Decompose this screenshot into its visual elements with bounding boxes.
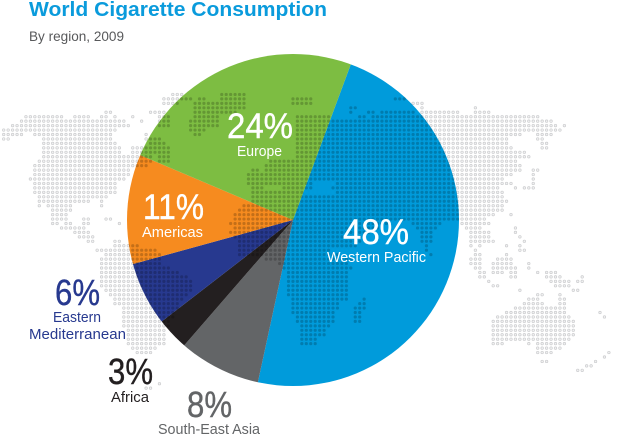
slice: Africa xyxy=(162,220,293,346)
slice: Europe xyxy=(140,54,351,220)
label: South-East Asia 8%: South-East Asia xyxy=(158,422,261,438)
dark map dots over pie xyxy=(128,92,459,346)
label: Americas 11% xyxy=(142,188,204,241)
slice: South-East Asia xyxy=(184,220,293,382)
label: Africa 3%: 3% xyxy=(108,351,153,392)
label: Americas 11%: Americas xyxy=(142,225,203,241)
world dot map xyxy=(4,94,609,388)
label: Africa 3% xyxy=(108,351,153,406)
label: South-East Asia 8% xyxy=(158,384,261,438)
slice: Americas xyxy=(127,155,293,264)
label: Europe 24%: 24% xyxy=(227,107,293,146)
label: Eastern Mediterranean 6%: Mediterranean xyxy=(29,327,126,343)
label: Africa 3%: Africa xyxy=(111,390,150,406)
slice: Eastern Mediterranean xyxy=(133,220,293,322)
label: Western Pacific 48%: 48% xyxy=(343,213,409,252)
label: Eastern Mediterranean 6% xyxy=(29,272,126,343)
label: Europe 24%: Europe xyxy=(237,144,282,160)
slice: Western Pacific xyxy=(258,64,459,386)
label: Western Pacific 48% xyxy=(327,213,426,266)
label: Eastern Mediterranean 6%: Eastern xyxy=(53,310,101,326)
subtitle: By region, 2009 xyxy=(29,29,124,44)
label: Eastern Mediterranean 6%: 6% xyxy=(55,272,100,313)
label: Western Pacific 48%: Western Pacific xyxy=(327,250,426,266)
label: South-East Asia 8%: 8% xyxy=(187,384,232,425)
label: Americas 11%: 11% xyxy=(143,188,204,227)
pie chart xyxy=(127,54,459,386)
